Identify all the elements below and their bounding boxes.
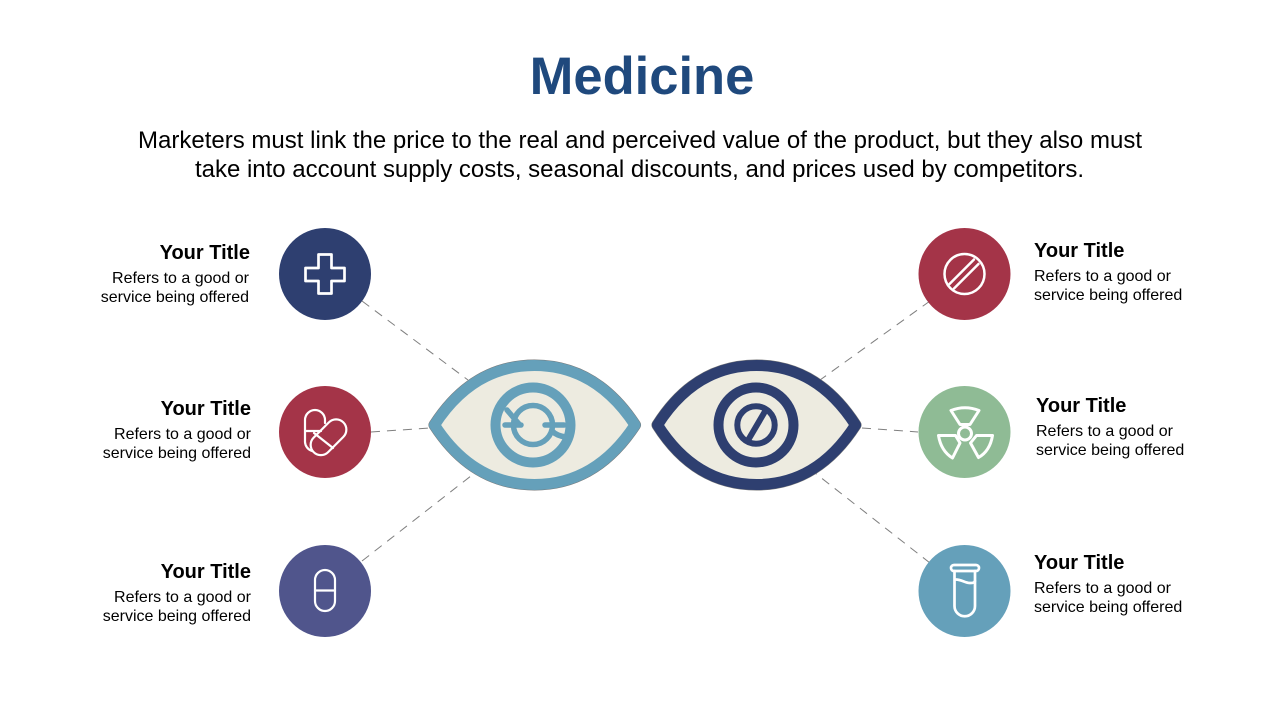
icon: tablet (944, 254, 984, 294)
right top text: Refers to a good or (1034, 268, 1172, 285)
subtitle text block (138, 127, 1142, 183)
subtitle text block: take into account supply costs, seasonal discounts, and prices used by competitors. (195, 156, 1084, 183)
left middle text: Refers to a good or (114, 426, 252, 443)
left top text (101, 242, 250, 306)
left bottom text: service being offered (103, 608, 251, 625)
right bottom circle (918, 545, 1010, 637)
left bottom text: Your Title (161, 561, 251, 583)
title: Medicine (530, 47, 754, 106)
item: left top (101, 228, 371, 320)
left bottom text: Refers to a good or (114, 589, 252, 606)
right top text: Your Title (1034, 240, 1124, 262)
connector lines (362, 301, 930, 563)
left bottom circle (279, 545, 371, 637)
item: right top (918, 228, 1182, 320)
right bottom text: Refers to a good or (1034, 580, 1172, 597)
left bottom text (103, 561, 252, 625)
right middle text (1036, 395, 1184, 459)
item: left bottom (103, 545, 371, 637)
icon: test tube (951, 565, 979, 616)
item: left middle (103, 386, 371, 478)
subtitle text block: Marketers must link the price to the real and perceived value of the product, but they also must (138, 127, 1142, 154)
left middle circle (279, 386, 371, 478)
right top text (1034, 240, 1182, 304)
right bottom text: service being offered (1034, 599, 1182, 616)
right middle text: service being offered (1036, 442, 1184, 459)
icon: medical cross (306, 254, 344, 294)
item: right bottom (918, 545, 1182, 637)
left middle text: Your Title (161, 398, 251, 420)
right bottom text: Your Title (1034, 552, 1124, 574)
left middle text: service being offered (103, 445, 251, 462)
left middle text (103, 398, 252, 462)
right middle text: Refers to a good or (1036, 423, 1174, 440)
icon: radiation (938, 408, 992, 458)
left top text: Refers to a good or (112, 270, 250, 287)
icon: capsules (305, 410, 351, 459)
left eye (434, 366, 635, 484)
right top circle (918, 228, 1010, 320)
right top text: service being offered (1034, 287, 1182, 304)
left top circle (279, 228, 371, 320)
right eye (658, 366, 856, 484)
left top text: Your Title (160, 242, 250, 264)
icon: pill (315, 570, 335, 611)
right bottom text (1034, 552, 1182, 616)
right middle text: Your Title (1036, 395, 1126, 417)
right middle circle (918, 386, 1010, 478)
left top text: service being offered (101, 289, 249, 306)
item: right middle (918, 386, 1184, 478)
